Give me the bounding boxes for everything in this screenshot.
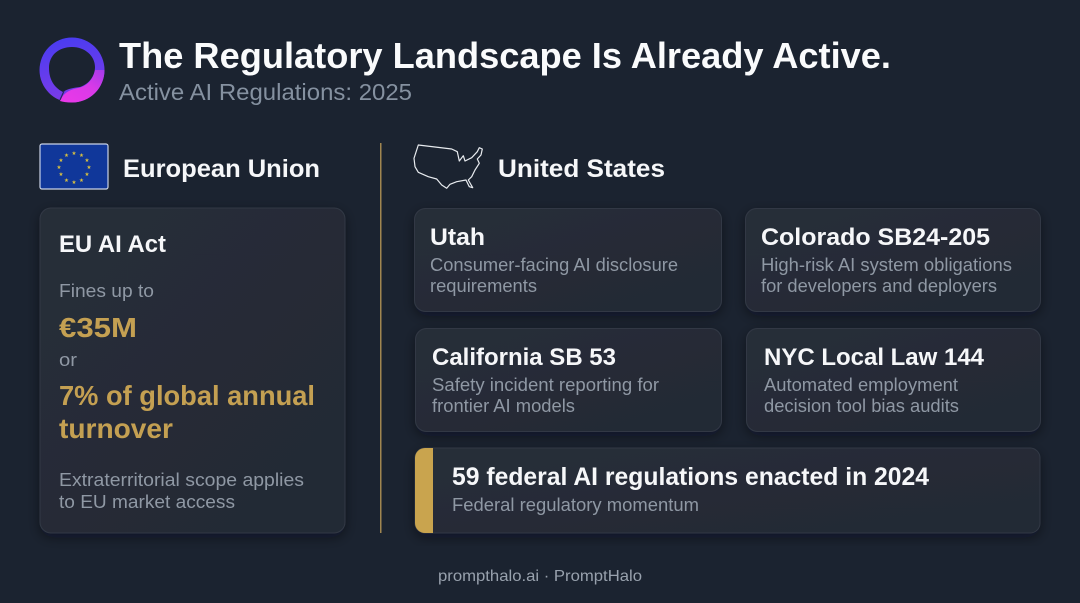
- Colorado heading: Colorado SB24-205: [761, 224, 990, 251]
- turnover line 1: 7% of global annual: [59, 380, 315, 411]
- panel: California: [416, 328, 722, 432]
- card heading: EU AI Act: [59, 231, 166, 258]
- California text 1: Safety incident reporting for: [432, 375, 659, 395]
- panel: NYC: [746, 328, 1040, 432]
- Colorado text 2: for developers and deployers: [761, 276, 997, 296]
- panel: federal callout: [415, 448, 1040, 533]
- icon: EU flag: ★: [64, 177, 69, 184]
- icon: EU flag: ★: [85, 157, 90, 164]
- icon: US map outline: [414, 145, 482, 188]
- Utah text 2: requirements: [430, 276, 537, 296]
- panel: EU AI Act: [40, 208, 345, 533]
- heading: United States: United States: [498, 155, 665, 183]
- title: The Regulatory Landscape Is Already Active.: [119, 35, 891, 76]
- Utah heading: Utah: [430, 224, 485, 251]
- fines label: Fines up to: [59, 281, 154, 301]
- fine amount: €35M: [59, 312, 137, 343]
- NYC text 2: decision tool bias audits: [764, 396, 959, 416]
- divider: [380, 143, 382, 533]
- NYC text 1: Automated employment: [764, 375, 958, 395]
- federal heading: 59 federal AI regulations enacted in 2024: [452, 463, 929, 491]
- turnover line 2: turnover: [59, 413, 173, 444]
- California text 2: frontier AI models: [432, 396, 575, 416]
- federal text: Federal regulatory momentum: [452, 495, 699, 515]
- scope line 1: Extraterritorial scope applies: [59, 470, 304, 490]
- Utah text 1: Consumer-facing AI disclosure: [430, 255, 678, 275]
- scope line 2: to EU market access: [59, 492, 235, 512]
- icon: EU flag: [40, 144, 108, 189]
- icon: EU flag: ★: [57, 164, 62, 171]
- panel: Utah: [414, 208, 722, 312]
- icon: EU flag: ★: [79, 152, 84, 159]
- panel: Colorado: [746, 208, 1040, 312]
- icon: EU flag: ★: [64, 152, 69, 159]
- icon: EU flag: ★: [87, 164, 92, 171]
- footer: prompthalo.ai · PromptHalo: [438, 568, 642, 585]
- icon: EU flag: ★: [85, 171, 90, 178]
- subtitle: Active AI Regulations: 2025: [119, 79, 412, 105]
- icon: EU flag: ★: [72, 179, 77, 186]
- or: or: [59, 350, 77, 370]
- California heading: California SB 53: [432, 344, 616, 371]
- heading: European Union: European Union: [123, 155, 320, 183]
- icon: EU flag: ★: [79, 177, 84, 184]
- NYC heading: NYC Local Law 144: [764, 344, 985, 371]
- logo: [40, 38, 104, 102]
- Colorado text 1: High-risk AI system obligations: [761, 255, 1012, 275]
- icon: EU flag: ★: [72, 150, 77, 157]
- icon: EU flag: ★: [59, 171, 64, 178]
- gold accent bar: [415, 448, 433, 533]
- icon: EU flag: ★: [59, 157, 64, 164]
